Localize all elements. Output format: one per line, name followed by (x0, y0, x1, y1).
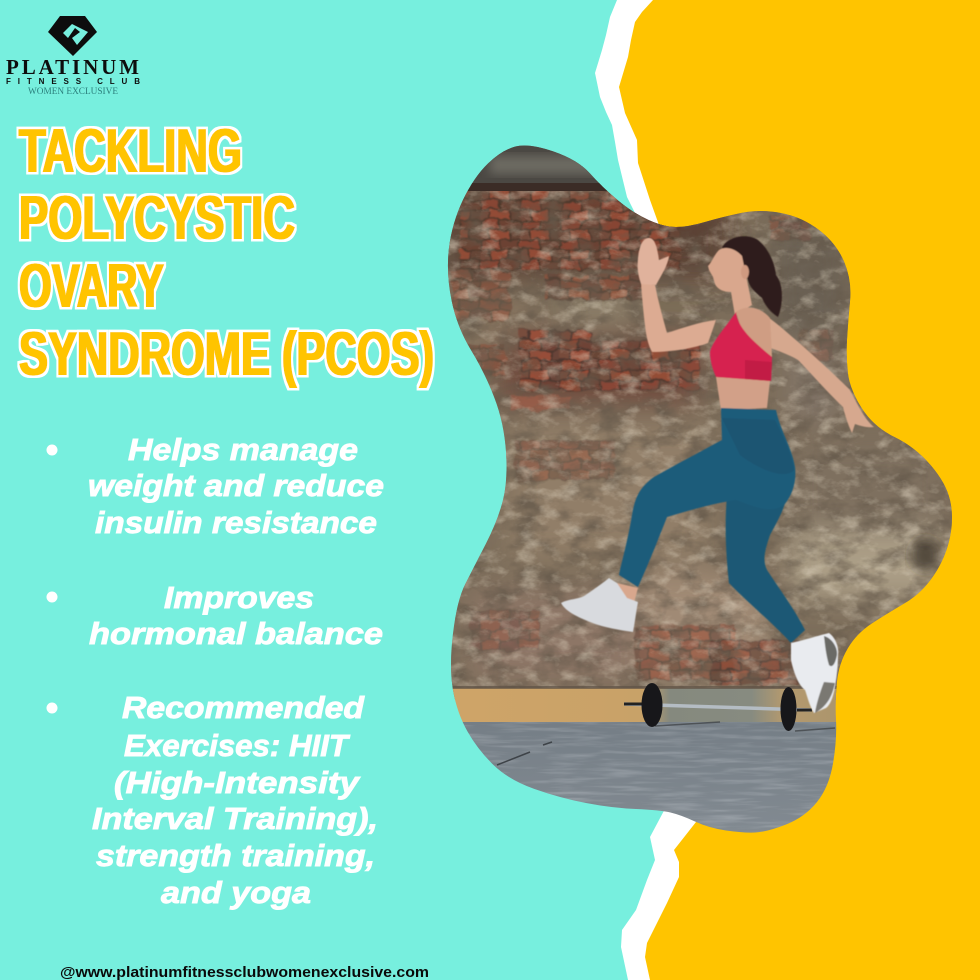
athlete: shoe soles (824, 636, 837, 666)
bullet: hormonal balance: Improves (164, 580, 314, 615)
athlete: raised hand (638, 238, 669, 285)
photo: plaster texture (440, 140, 960, 690)
title: OVARY (19, 252, 164, 321)
title: POLYCYSTIC (19, 184, 295, 253)
photo: athlete (561, 236, 874, 713)
athlete: rear arm (770, 318, 874, 433)
athlete: shoulder (736, 308, 772, 357)
title: SYNDROME (PCOS) (19, 320, 434, 389)
bullet: recommended exercises: Recommended (122, 690, 365, 725)
torn white paper strip, bottom (621, 805, 720, 980)
athlete: raised arm (641, 283, 716, 352)
photo: barbell (624, 683, 835, 731)
bullet: recommended exercises: strength training, (96, 838, 375, 873)
photo: dark ceiling band (468, 146, 608, 191)
athlete: red sports top (710, 312, 772, 381)
photo: dark wall damage (911, 539, 939, 571)
bullet: weight and insulin: insulin resistance (95, 505, 377, 540)
bullet: hormonal balance (46, 580, 383, 651)
bullet: recommended exercises: Exercises: HIIT (124, 728, 351, 763)
athlete: hips and front leg (619, 408, 795, 587)
logo: Platinum Fitness Club (6, 16, 140, 96)
logo icon: diamond (48, 16, 97, 56)
photo: exposed bricks (450, 190, 835, 685)
photo: athlete jumping in front of brick wall, blob shaped (440, 140, 960, 842)
athlete: midriff (716, 377, 770, 410)
logo subtitle: FITNESS CLUB (6, 77, 140, 86)
bullet: recommended exercises: and yoga (161, 875, 311, 910)
bullet: weight and insulin: Helps manage (128, 432, 358, 467)
athlete: head and neck (708, 248, 752, 316)
title (19, 117, 434, 389)
logo tagline: WOMEN EXCLUSIVE (28, 86, 119, 96)
photo: concrete floor (462, 722, 836, 833)
athlete: front shoe (561, 578, 638, 632)
bullet: weight and insulin (46, 432, 384, 540)
yellow panel with torn edge (619, 0, 980, 980)
athlete: top lower band (745, 360, 772, 381)
bullet: hormonal balance: hormonal balance (89, 616, 383, 651)
athlete: ponytail and hair (722, 236, 782, 317)
bullet: weight and insulin: weight and reduce (88, 468, 384, 503)
athlete: rear shoe (791, 633, 838, 713)
bullet: recommended exercises: (High-Intensity (114, 765, 361, 800)
logo wordmark: PLATINUM (6, 55, 139, 79)
torn white paper strip, top (595, 0, 700, 232)
athlete: leggings shading (722, 418, 794, 474)
photo: wall tonal patches (440, 190, 950, 680)
bullet: recommended exercises: Interval Training), (92, 801, 378, 836)
title: TACKLING (19, 117, 242, 186)
photo: wall base (440, 140, 960, 700)
athlete: ear (741, 265, 749, 279)
bullet: recommended exercises (46, 690, 378, 910)
athlete: front ankle (617, 583, 638, 603)
photo: skirting board (440, 688, 850, 722)
athlete: rear leg (726, 495, 805, 643)
